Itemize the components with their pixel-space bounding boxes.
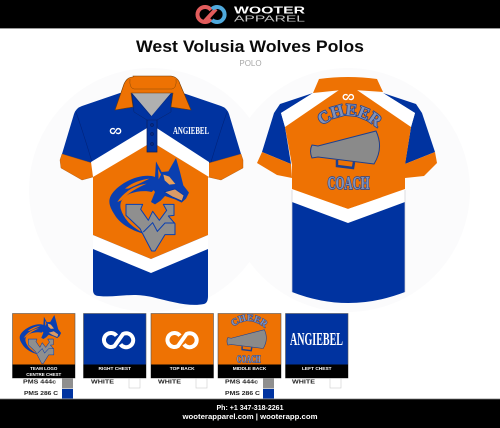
swatch: right chest: RIGHT CHEST <box>99 366 131 372</box>
colour key: middle back: PMS 286 C <box>225 391 260 397</box>
footer websites: wooterapparel.com | wooterapp.com <box>181 412 318 421</box>
colour key: team logo: PMS 444c <box>23 380 56 386</box>
colour key: right chest <box>91 378 140 388</box>
colour key: middle back: PMS 444c <box>225 380 258 386</box>
faint circle behind front garment <box>29 68 273 312</box>
front blue base <box>62 93 241 305</box>
placket <box>147 117 157 152</box>
colour key: team logo <box>23 378 73 399</box>
icon: right chest logo <box>110 129 121 134</box>
swatch: right chest <box>84 314 146 378</box>
back orange yoke and body <box>285 88 411 209</box>
swatch: top back: TOP BACK <box>170 366 195 372</box>
wolf logo <box>109 158 189 251</box>
collar inner stand <box>132 94 171 120</box>
colour key: team logo: PMS 286 C <box>24 391 58 397</box>
back white yoke band <box>281 90 415 127</box>
logo wordmark: APPAREL <box>234 14 306 24</box>
swatch: middle back: COACH <box>237 355 261 366</box>
left chest name: ANGIEBEL <box>173 126 209 137</box>
front polo shirt <box>60 76 243 305</box>
icon: megaphone <box>310 131 380 168</box>
logo wordmark <box>234 6 306 24</box>
colour key: middle back <box>225 378 274 399</box>
colour key: top back: WHITE <box>158 380 181 386</box>
back left sleeve <box>262 93 313 164</box>
logo wordmark: WOOTER <box>234 6 306 16</box>
faint circle behind back garment <box>226 68 470 312</box>
colour key: right chest: WHITE <box>91 380 114 386</box>
swatch: team logo centre chest: CENTRE CHEST <box>26 372 62 377</box>
swatch: left chest: ANGIEBEL <box>290 329 343 349</box>
left cuff <box>60 154 93 180</box>
inner neck <box>132 93 171 116</box>
sleeve seams <box>76 112 227 162</box>
swatch: middle back <box>218 313 282 378</box>
back collar <box>313 77 383 93</box>
back polo shirt <box>257 77 437 303</box>
back lower chevron <box>292 189 405 223</box>
swatch: middle back: MIDDLE BACK <box>233 366 267 372</box>
back right cuff <box>405 152 437 178</box>
colour key: left chest <box>292 378 341 388</box>
title: West Volusia Wolves Polos <box>136 37 364 56</box>
colour key: left chest: WHITE <box>292 380 315 386</box>
icon: wooter logo <box>198 7 225 22</box>
icon: top back logo <box>343 95 353 100</box>
swatch: left chest <box>286 314 348 378</box>
subtitle: POLO <box>239 59 262 68</box>
side seams <box>292 190 405 292</box>
footer bar <box>0 398 500 428</box>
lower white chevron <box>93 235 208 273</box>
coach text: COACH <box>328 173 370 193</box>
swatch: top back <box>151 314 214 378</box>
swatch: team logo centre chest: TEAM LOGO <box>30 366 58 371</box>
collar <box>115 76 191 110</box>
swatch: left chest: LEFT CHEST <box>302 366 332 372</box>
swatch: middle back: CHEER <box>231 314 268 328</box>
back lower blue <box>292 202 405 303</box>
footer phone: Ph: +1 347-318-2261 <box>216 403 284 412</box>
orange panel <box>93 142 208 259</box>
swatch: team logo centre chest <box>12 314 75 378</box>
upper white chevron <box>91 125 209 177</box>
back right sleeve <box>383 93 435 164</box>
right cuff <box>208 154 243 180</box>
back left cuff <box>257 152 292 178</box>
header bar <box>0 0 500 29</box>
cheer text: CHEER <box>318 103 382 129</box>
colour key: top back <box>158 378 207 388</box>
collar band line <box>130 79 176 89</box>
